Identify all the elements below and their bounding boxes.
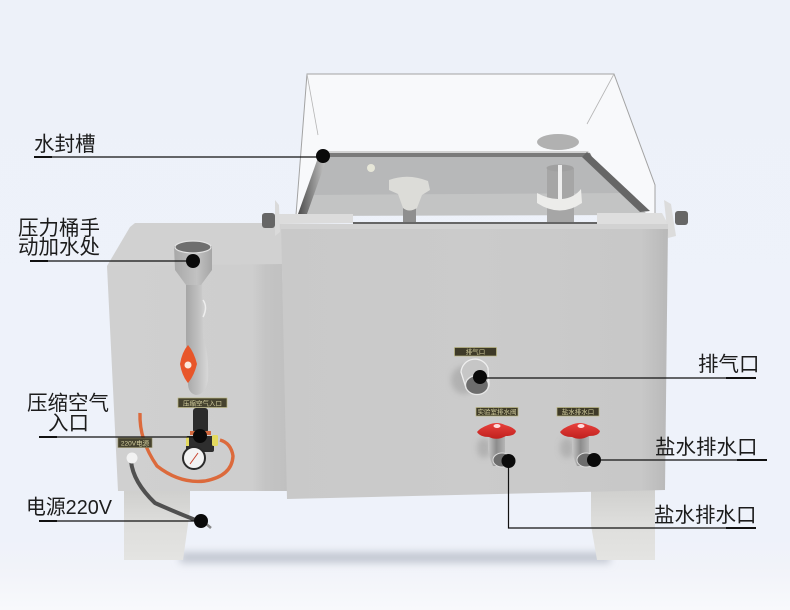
callout: exhaust port [473,353,760,384]
salt spray test chamber [107,74,688,560]
callout: exhaust port: 排气口 [698,353,760,376]
callout: compressed air inlet: 压缩空气 [27,392,109,415]
orange valve handle [180,345,197,383]
brine drain tag: 盐水排水口 [562,407,594,416]
callout: brine drain upper: 盐水排水口 [655,436,758,459]
brine drain valve [560,423,600,467]
callout: pressure tank manual water filling: 压力桶手 [18,217,100,240]
right leg [591,488,655,560]
exhaust pipe [451,359,489,394]
callout: 220V power [26,496,208,528]
callout: water seal trough [34,133,330,163]
lab drain valve [477,423,516,467]
transparent lid and salt spray tank [262,74,668,224]
callout: 220V power: 电源220V [26,496,112,519]
callout: water seal trough: 水封槽 [34,133,96,156]
callout: brine drain upper [587,436,767,467]
left hinge bolt [262,200,280,236]
power cable [126,452,211,528]
air pressure regulator with gauge [183,408,218,469]
exhaust tag: 排气口 [466,347,485,356]
side box with pressure tank [107,223,288,491]
left leg [124,490,190,560]
callout: compressed air inlet: 入口 [48,412,89,435]
lab drain tag: 实验室排水阀 [478,407,516,416]
callout: compressed air inlet [27,392,207,443]
ground shadow [180,552,610,563]
brine drain tag [557,407,599,416]
callout: brine drain lower: 盐水排水口 [654,504,756,527]
spray tower [537,134,582,223]
power tag [118,438,152,448]
callout: brine drain lower [502,454,756,529]
callout: pressure tank manual water filling: 动加水处 [18,236,100,259]
spray nozzle funnel [389,177,430,224]
right hinge bolt [664,200,688,238]
main cabinet [281,224,668,499]
air inlet tag [178,398,227,408]
orange air hose [140,413,233,481]
funnel and manual water inlet [174,241,212,395]
exhaust tag [454,347,496,356]
callout: pressure tank manual water filling [18,217,200,268]
air inlet tag: 压缩空气入口 [183,398,222,408]
power tag: 220V电源 [121,438,150,448]
